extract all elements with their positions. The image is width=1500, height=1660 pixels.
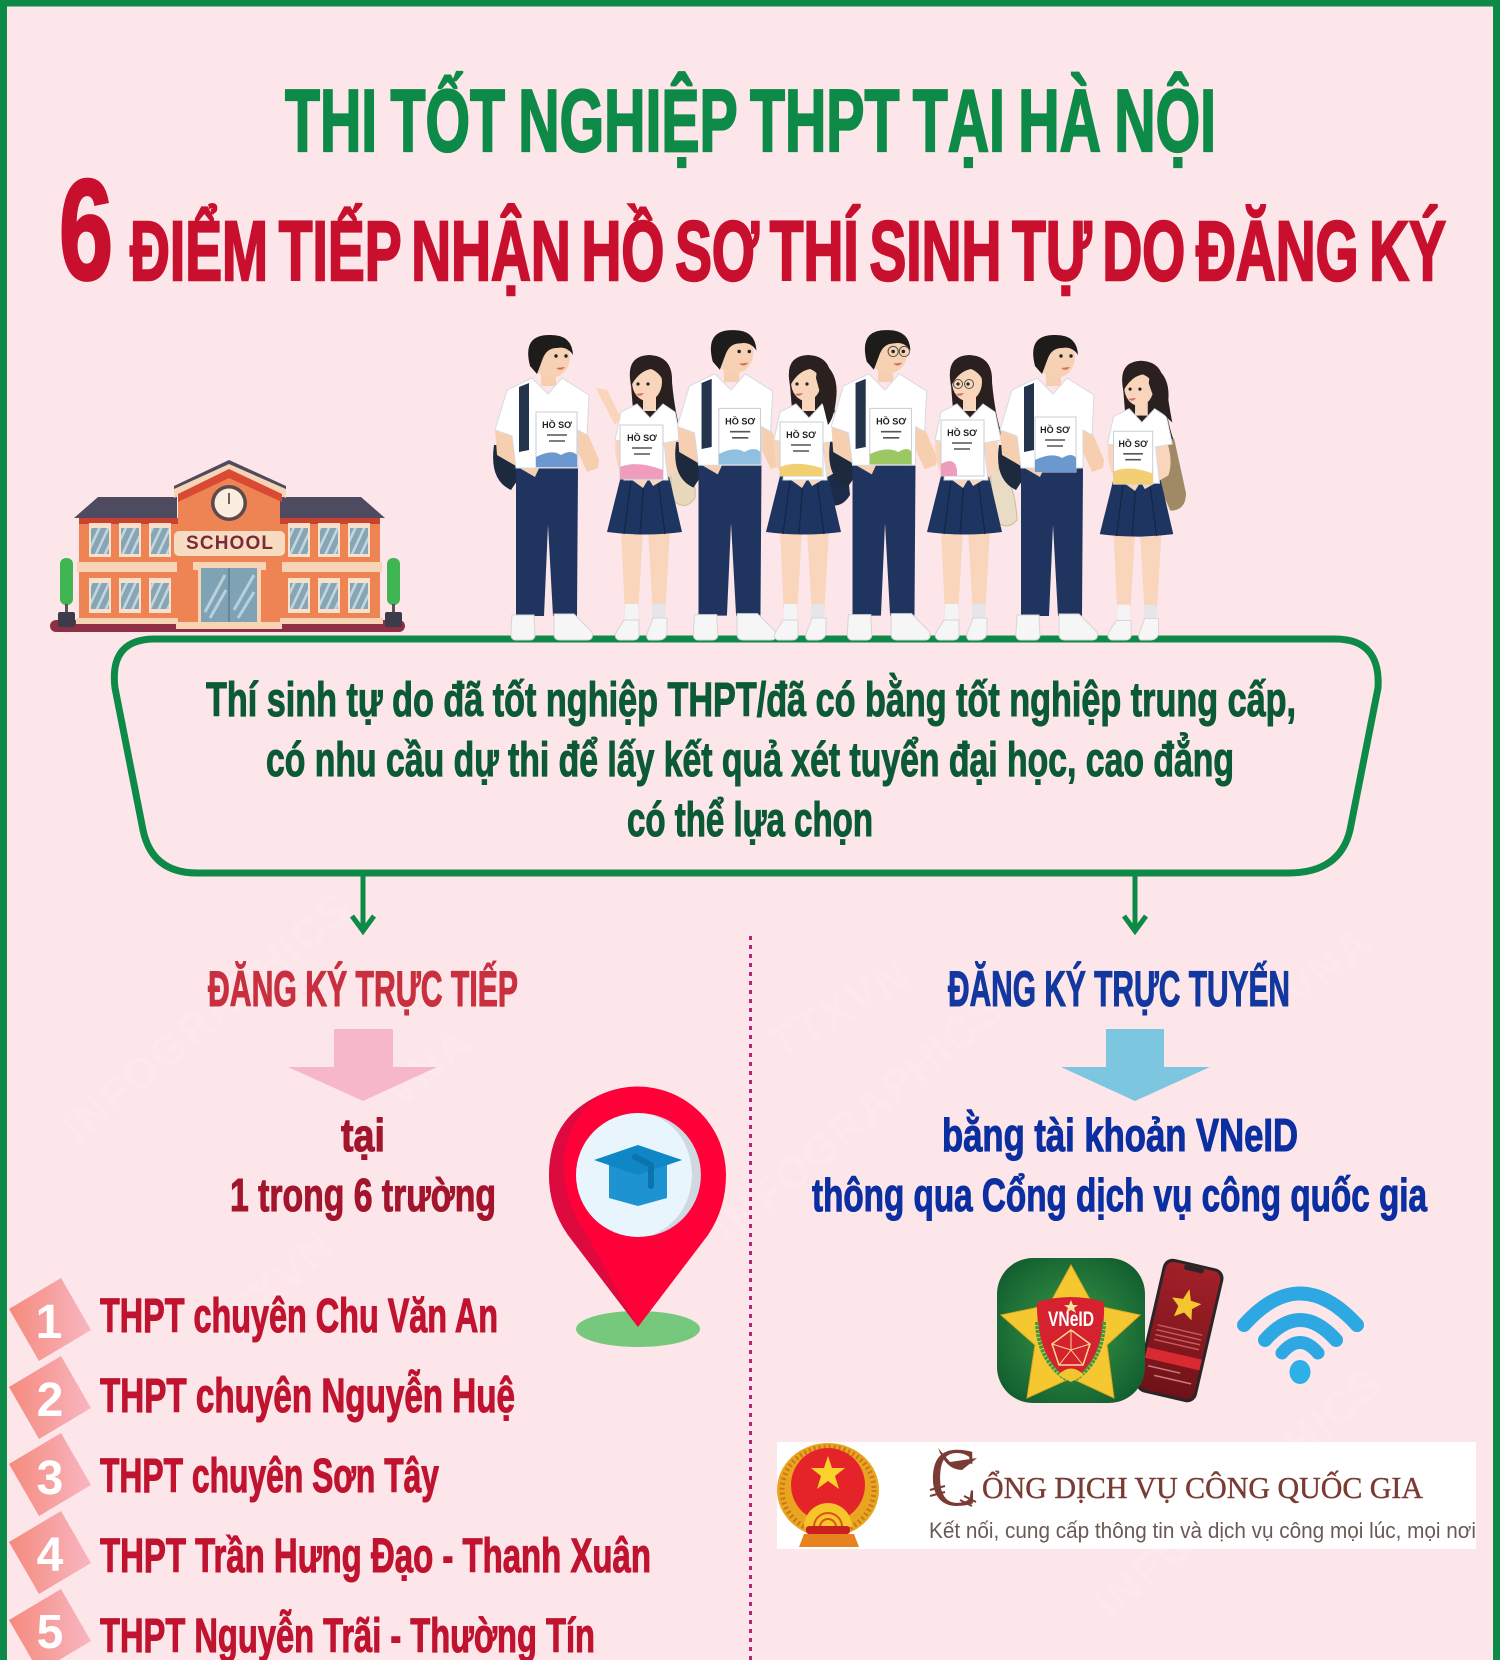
text: TTXVN (195, 1221, 345, 1358)
item 2: THPT chuyên Nguyễn Huệ (100, 1369, 515, 1423)
icon: national emblem (777, 1443, 879, 1547)
item 4: THPT Trần Hưng Đạo - Thanh Xuân (100, 1530, 651, 1583)
illustration: school building (50, 460, 405, 632)
item 3 (9, 1433, 439, 1516)
text: at one of six schools: tại (341, 1109, 385, 1161)
icon: location pin with graduation cap (549, 1086, 726, 1347)
student 8 (1100, 361, 1186, 640)
text: at one of six schools (230, 1109, 496, 1221)
title line 2 (59, 151, 1446, 310)
illustration: group of students (493, 330, 1186, 640)
student 2 (596, 355, 695, 640)
item 3: THPT chuyên Sơn Tây (100, 1450, 439, 1503)
item 5 (9, 1589, 595, 1660)
banner: national public service portal: ỔNG DỊCH VỤ CÔNG QUỐC GIA (982, 1469, 1424, 1505)
icon: VNeID app (997, 1258, 1145, 1403)
text: INFOGRAPHICS (705, 983, 1013, 1253)
arrow: to direct registration (352, 873, 374, 931)
banner: national public service portal: Kết nối, cung cấp thông tin và dịch vụ công mọi lúc, mọi nơi (929, 1518, 1476, 1543)
text: VNA (375, 1017, 482, 1118)
banner: national public service portal (777, 1431, 1476, 1549)
heading: direct registration: ĐĂNG KÝ TRỰC TIẾP (208, 961, 518, 1017)
icon: phone with app (1134, 1257, 1226, 1404)
student 1 (493, 335, 599, 640)
info box: eligibility: có thể lựa chọn (627, 794, 873, 847)
text: via VNeID account: bằng tài khoản VNeID (942, 1109, 1298, 1161)
icon: VNeID app: VNeID (1048, 1308, 1094, 1331)
title line 2: 6 (59, 151, 113, 310)
text: via VNeID account (812, 1109, 1427, 1221)
item 1 (9, 1278, 498, 1361)
logo: stylised C with bird head: C (930, 1431, 977, 1524)
text: TTXVN (760, 949, 919, 1069)
text: INFOGRAPHICS (53, 883, 361, 1153)
student 6 (927, 355, 1017, 640)
arrow: blue down (1061, 1029, 1210, 1101)
item 1: 1 (36, 1296, 62, 1349)
item 3: 3 (37, 1452, 63, 1505)
list: six schools (9, 1278, 651, 1660)
arrow: to online registration (1124, 873, 1146, 931)
info box: eligibility (114, 639, 1378, 873)
student 4 (766, 355, 850, 640)
student 5 (829, 330, 937, 640)
item 1: THPT chuyên Chu Văn An (100, 1290, 498, 1343)
item 2: 2 (37, 1374, 63, 1427)
dotted divider (749, 936, 752, 1660)
item 4: 4 (37, 1529, 64, 1582)
item 4 (9, 1511, 651, 1594)
arrow: pink down (288, 1029, 437, 1101)
text: VNA (1275, 917, 1382, 1018)
item 2 (9, 1356, 515, 1439)
icon: wifi (1244, 1294, 1357, 1384)
student 7 (998, 335, 1104, 640)
illustration: school building: SCHOOL (186, 533, 273, 554)
text: INFOGRAPHICS (1085, 1358, 1393, 1628)
student 3 (675, 330, 783, 640)
item 5: 5 (37, 1606, 63, 1659)
text: at one of six schools: 1 trong 6 trường (230, 1169, 496, 1221)
